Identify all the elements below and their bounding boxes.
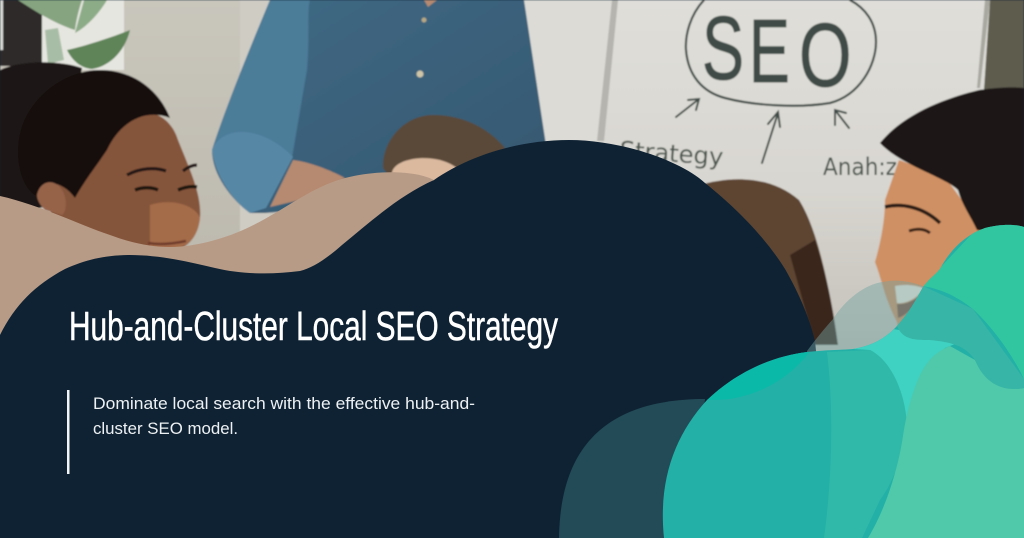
whiteboard bbox=[597, 0, 1024, 360]
teal blob with overlaid figures bbox=[660, 220, 1024, 538]
subtitle text: cluster SEO model. bbox=[93, 419, 238, 438]
neck shadow bbox=[897, 286, 1024, 389]
bright overlap area bbox=[707, 351, 810, 400]
subtitle text bbox=[93, 394, 475, 438]
whiteboard word: Strategy: Strategy bbox=[619, 136, 724, 171]
translucent lens over photo bbox=[807, 281, 1024, 538]
whiteboard word: SEO: E bbox=[749, 1, 790, 102]
presenter in denim shirt bbox=[212, 0, 546, 213]
sleeve of seated woman bbox=[824, 350, 907, 538]
smiling man on the right bbox=[875, 87, 1024, 360]
accent bar bbox=[67, 390, 70, 474]
title: Hub-and-Cluster Local SEO Strategy bbox=[69, 303, 558, 349]
woman on the left bbox=[0, 62, 200, 250]
whiteboard word: SEO: S bbox=[702, 0, 744, 99]
whiteboard word: SEO bbox=[702, 0, 852, 105]
upper green area bbox=[923, 220, 1024, 379]
navy wave panel bbox=[0, 140, 835, 538]
seated woman, long hair bbox=[700, 179, 838, 345]
muted teal circle shape bbox=[559, 399, 705, 538]
bright gap behind figures bbox=[854, 329, 954, 417]
whiteboard word: SEO: O bbox=[799, 5, 852, 105]
seated person, back of head bbox=[383, 115, 505, 200]
tan wave shape bbox=[0, 172, 434, 335]
subtitle text: Dominate local search with the effective hub-and- bbox=[93, 394, 475, 413]
sweater body bbox=[868, 346, 1024, 538]
SEO diagram bbox=[676, 0, 876, 163]
window frame bbox=[0, 0, 124, 70]
plant bbox=[18, 0, 130, 69]
whiteboard word: Analyz: Anah:z bbox=[823, 153, 897, 181]
